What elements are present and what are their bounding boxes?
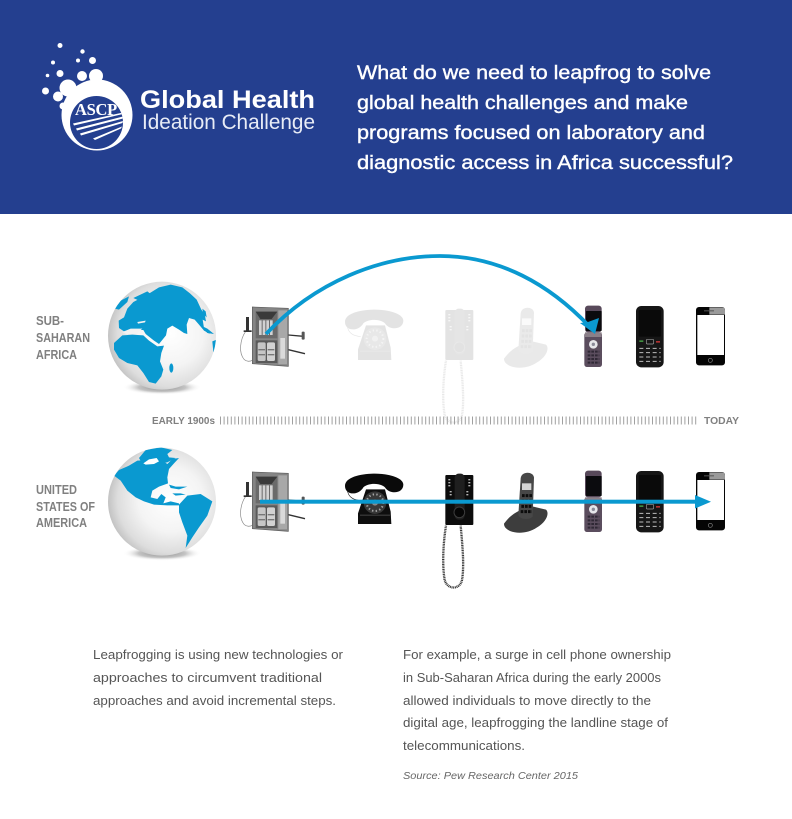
heading question: global health challenges and make <box>357 92 688 114</box>
icon: faded wall telephone <box>443 309 473 422</box>
arrow: leapfrog arc <box>266 256 599 334</box>
phone row: Sub-Saharan Africa <box>241 306 725 422</box>
heading question: What do we need to leapfrog to solve <box>357 62 711 84</box>
globe: the Americas <box>108 447 216 561</box>
text: cell phone example: For example, a surge in cell phone ownership <box>403 647 671 662</box>
icon: crank wall telephone <box>241 472 305 531</box>
label: United States of America: UNITED <box>36 483 77 497</box>
timeline ticks <box>220 416 698 424</box>
icon: cordless telephone <box>504 473 548 533</box>
heading question <box>357 62 733 174</box>
text: cell phone example: telecommunications. <box>403 738 525 753</box>
logo wordmark: Global Health <box>140 86 315 114</box>
logo seal: ASCP lettering on blue disc: ASCP <box>75 100 117 118</box>
icon: flip phone <box>584 471 602 532</box>
text: cell phone example: digital age, leapfrogging the landline stage of <box>403 715 668 730</box>
label: United States of America: AMERICA <box>36 516 87 530</box>
icon: candybar phone <box>636 306 664 367</box>
arrow: incremental path <box>260 495 711 508</box>
label: Sub-Saharan Africa: SUB- <box>36 314 64 328</box>
icon: candybar phone <box>636 471 664 532</box>
icon: wall telephone with coiled cord <box>443 474 473 587</box>
icon: faded rotary telephone <box>345 310 403 360</box>
label: Sub-Saharan Africa <box>36 314 90 362</box>
icon: smartphone <box>696 307 725 365</box>
text: definition of leapfrogging: Leapfrogging is using new technologies or <box>93 647 344 662</box>
text: definition of leapfrogging: approaches and avoid incremental steps. <box>93 693 336 708</box>
timeline end label: TODAY <box>704 415 739 427</box>
label: United States of America: STATES OF <box>36 500 95 514</box>
timeline <box>152 415 739 427</box>
label: Sub-Saharan Africa: AFRICA <box>36 348 77 362</box>
icon: faded cordless telephone <box>504 308 548 368</box>
heading question: programs focused on laboratory and <box>357 122 705 144</box>
text: cell phone example: allowed individuals to move directly to the <box>403 693 651 708</box>
icon: rotary telephone <box>345 474 403 524</box>
icon: crank wall telephone <box>241 307 305 366</box>
logo wordmark: Ideation Challenge <box>142 111 315 134</box>
icon: flip phone <box>584 306 602 367</box>
icon: ASCP bubble ring <box>42 43 132 150</box>
text: cell phone example <box>403 647 671 753</box>
timeline start label: EARLY 1900s <box>152 415 215 427</box>
text: definition of leapfrogging: approaches to circumvent traditional <box>93 670 322 685</box>
globe: Africa and Eurasia <box>108 282 217 395</box>
logo seal: ASCP lettering on blue disc <box>70 96 123 149</box>
text: definition of leapfrogging <box>93 647 344 708</box>
heading question: diagnostic access in Africa successful? <box>357 152 733 174</box>
logo wordmark <box>140 86 315 134</box>
phone row: United States of America <box>241 471 725 587</box>
text: cell phone example: in Sub-Saharan Africa during the early 2000s <box>403 670 661 685</box>
label: United States of America <box>36 483 95 530</box>
header band <box>0 0 792 214</box>
icon: smartphone <box>696 472 725 530</box>
logo: ASCP Global Health Ideation Challenge <box>42 43 315 150</box>
label: Sub-Saharan Africa: SAHARAN <box>36 331 90 345</box>
source note: Source: Pew Research Center 2015 <box>403 770 578 782</box>
